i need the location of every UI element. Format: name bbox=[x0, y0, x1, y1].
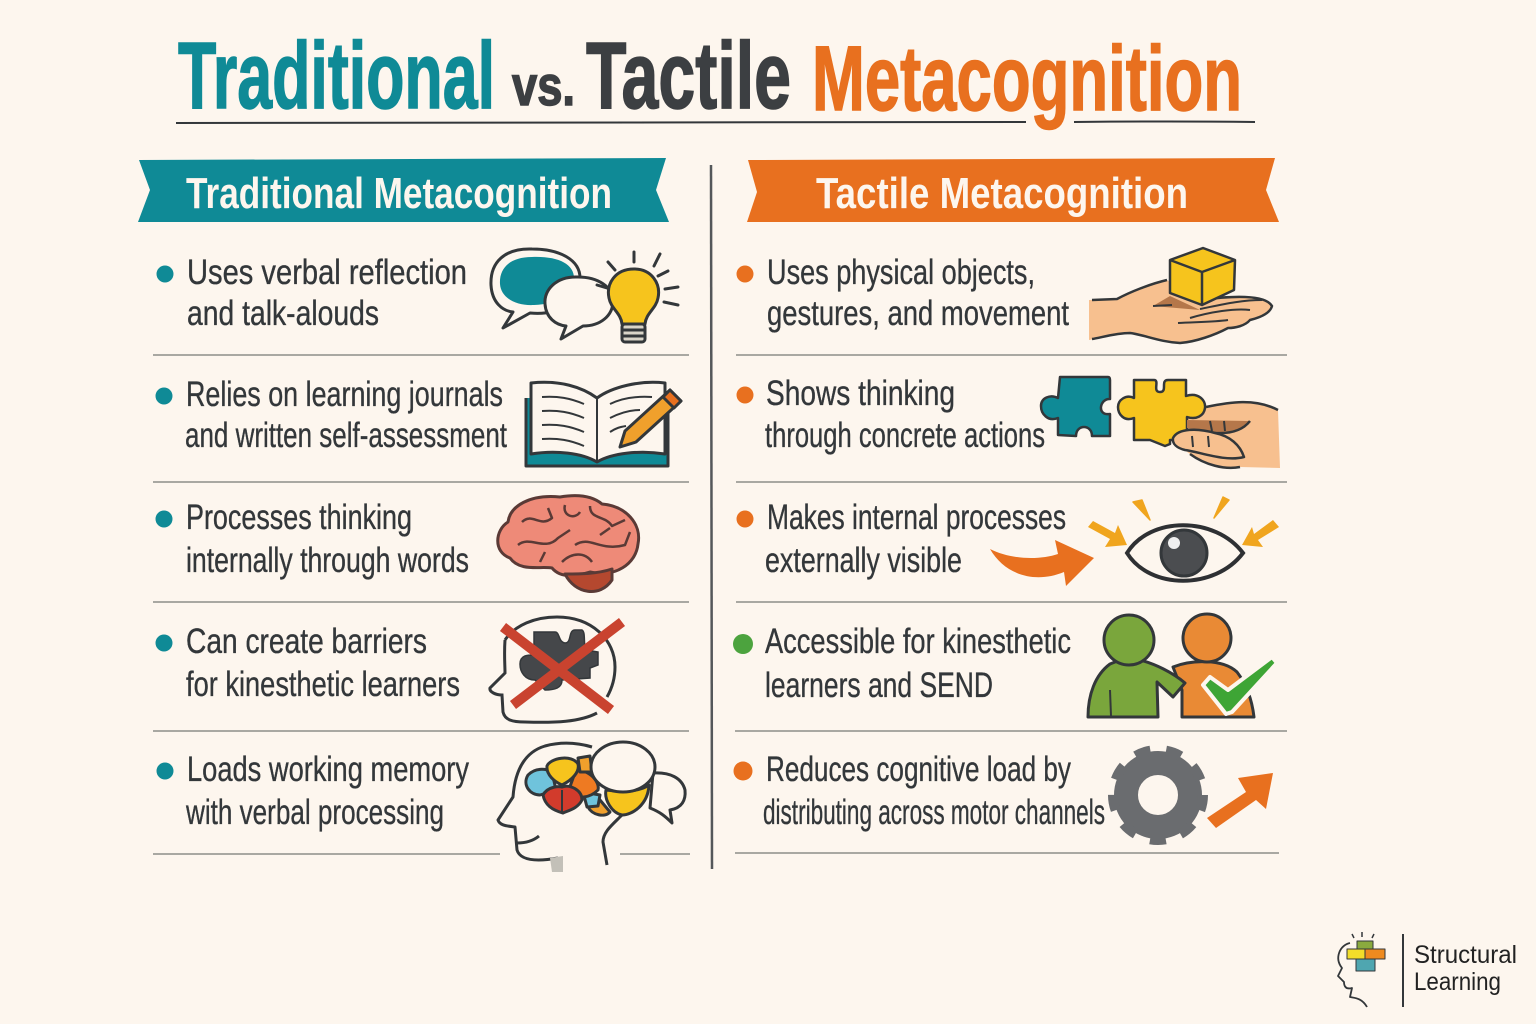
bullet: concrete actions bbox=[736, 374, 1045, 455]
bullet: concrete actions: Shows thinking bbox=[766, 374, 955, 413]
bullet: concrete actions: through concrete actions bbox=[765, 416, 1045, 455]
title: Tactile bbox=[586, 23, 791, 129]
heading banner: traditional: Traditional Metacognition bbox=[186, 169, 612, 218]
bullet: kinesthetic and SEND: Accessible for kinesthetic bbox=[765, 622, 1071, 661]
icon: eye with arrows bbox=[990, 497, 1279, 586]
title: Traditional bbox=[178, 23, 495, 129]
icon: two people and check mark bbox=[1088, 614, 1277, 717]
bullet: externally visible: externally visible bbox=[765, 541, 962, 580]
bullet: motor channels: Reduces cognitive load by bbox=[766, 750, 1071, 789]
bullet: working memory: Loads working memory bbox=[187, 750, 469, 789]
panel: tactile metacognition bbox=[733, 158, 1287, 853]
panel: traditional metacognition bbox=[138, 158, 690, 872]
bullet: physical objects: gestures, and movement bbox=[767, 294, 1069, 333]
bullet: kinesthetic and SEND bbox=[733, 622, 1071, 705]
icon: open journal and pencil bbox=[526, 382, 681, 466]
bullet: externally visible bbox=[736, 498, 1066, 580]
bullet: working memory: with verbal processing bbox=[185, 793, 444, 832]
icon: speech bubbles and light bulb bbox=[491, 249, 678, 342]
bullet: barriers: for kinesthetic learners bbox=[186, 665, 460, 704]
icon: brain bbox=[498, 496, 639, 591]
bullet: motor channels: distributing across motor channels bbox=[763, 793, 1105, 832]
title: Metacognition bbox=[812, 28, 1242, 130]
title bbox=[178, 23, 1242, 130]
icon: hand with puzzle pieces bbox=[1041, 377, 1280, 468]
heading banner: tactile: Tactile Metacognition bbox=[816, 169, 1188, 218]
bullet: verbal reflection: and talk-alouds bbox=[187, 294, 379, 333]
bullet: learning journals bbox=[156, 375, 507, 455]
bullet: motor channels bbox=[734, 750, 1105, 832]
bullet: physical objects: Uses physical objects, bbox=[767, 253, 1035, 292]
icon: head with crossed-out puzzle bbox=[490, 617, 622, 722]
bullet: processes thinking: internally through words bbox=[186, 541, 469, 580]
heading banner: tactile bbox=[747, 158, 1279, 222]
logo: Structural Learning: Learning bbox=[1414, 968, 1501, 996]
bullet: externally visible: Makes internal processes bbox=[767, 498, 1066, 537]
bullet: barriers: Can create barriers bbox=[186, 622, 427, 661]
bullet: verbal reflection bbox=[156, 253, 467, 333]
bullet: processes thinking bbox=[156, 498, 469, 580]
logo: Structural Learning bbox=[1338, 932, 1517, 1007]
icon: hand holding cube bbox=[1089, 248, 1272, 343]
bullet: verbal reflection: Uses verbal reflection bbox=[187, 253, 467, 292]
heading banner: traditional bbox=[138, 158, 669, 222]
title: vs. bbox=[512, 54, 575, 117]
icon: head with coloured blocks bbox=[1338, 932, 1385, 1007]
icon: gear and arrow bbox=[1113, 750, 1273, 840]
bullet: learning journals: and written self-assessment bbox=[185, 416, 507, 455]
bullet: barriers bbox=[156, 622, 460, 704]
bullet: physical objects bbox=[736, 253, 1069, 333]
icon: head with overloaded thoughts bbox=[498, 742, 685, 872]
bullet: working memory bbox=[156, 750, 469, 832]
bullet: learning journals: Relies on learning journals bbox=[186, 375, 503, 414]
bullet: processes thinking: Processes thinking bbox=[186, 498, 412, 537]
logo: Structural Learning: Structural bbox=[1414, 941, 1517, 969]
bullet: kinesthetic and SEND: learners and SEND bbox=[765, 666, 993, 705]
